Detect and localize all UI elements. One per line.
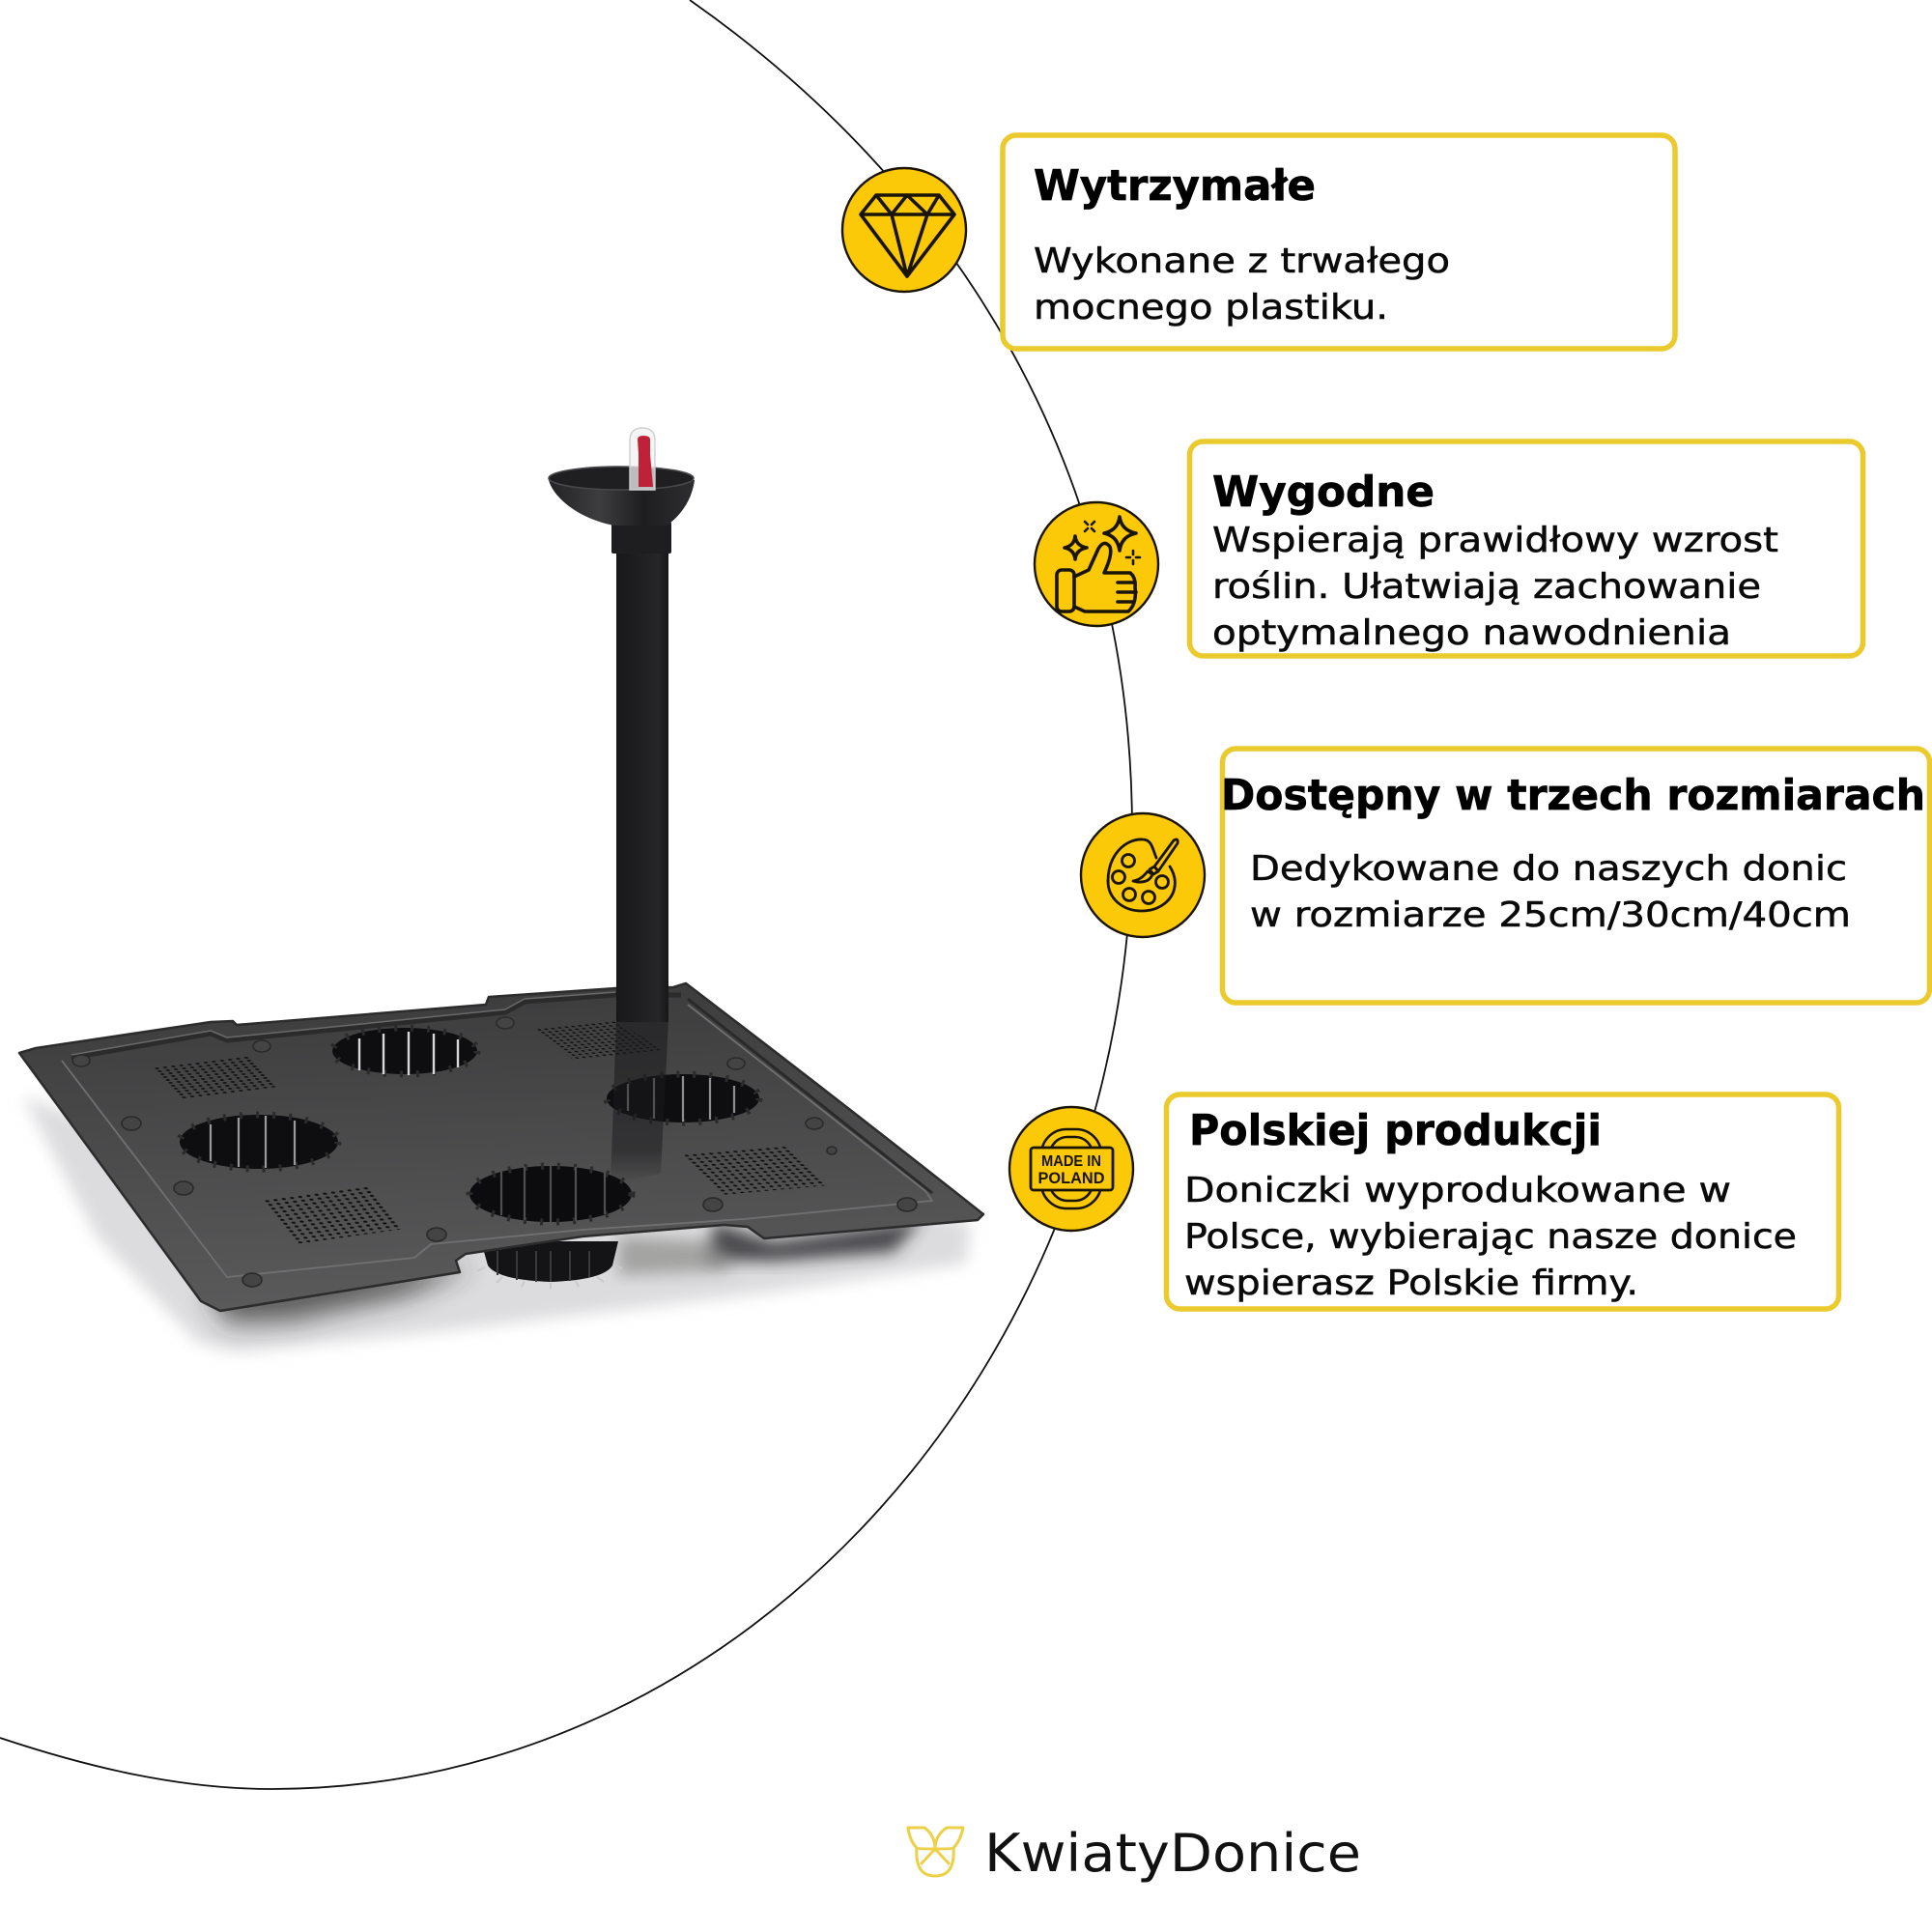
heading: Wygodne [1212, 468, 1435, 517]
body text [1034, 242, 1450, 327]
plate body [19, 983, 983, 1311]
body text: Wykonane z trwałego [1034, 242, 1450, 281]
plate bolts [72, 1017, 917, 1287]
logo mark: butterfly [908, 1828, 963, 1876]
icon: made in Poland badge: MADE IN [1041, 1153, 1101, 1170]
plate raised rim lines [62, 992, 932, 1277]
body text [1250, 849, 1851, 935]
hole top [332, 1028, 477, 1075]
funnel [549, 467, 695, 526]
tube collar [611, 522, 671, 554]
feature card: Wytrzymałe [1003, 135, 1675, 349]
body text: w rozmiarze 25cm/30cm/40cm [1250, 895, 1851, 935]
water level indicator [630, 428, 655, 490]
heading: Polskiej produkcji [1189, 1106, 1602, 1155]
body text: Polsce, wybierając nasze donice [1184, 1217, 1797, 1257]
feature card: Dostępny w trzech rozmiarach [1221, 749, 1930, 1003]
body text: Doniczki wyprodukowane w [1184, 1171, 1731, 1210]
plate shadow [23, 1096, 971, 1352]
icon: made in Poland badge: POLAND [1037, 1169, 1105, 1187]
body text: Wspierają prawidłowy wzrost [1212, 521, 1778, 560]
icon: made in Poland badge [1009, 1107, 1133, 1231]
reservoir tube [616, 541, 668, 1022]
body text: wspierasz Polskie firmy. [1184, 1264, 1638, 1303]
heading: Dostępny w trzech rozmiarach [1221, 771, 1925, 820]
hole right [607, 1074, 759, 1122]
icon: thumbs up with sparkles [1035, 502, 1158, 626]
feature card: Polskiej produkcji [1167, 1094, 1839, 1309]
body text: optymalnego nawodnienia [1212, 613, 1731, 653]
brand logo [908, 1823, 1361, 1884]
product photo: watering insert [19, 428, 983, 1352]
logo wordmark: KwiatyDonice [984, 1823, 1361, 1884]
hole left [180, 1115, 338, 1169]
plate perforated vents [152, 1021, 829, 1244]
hole front [469, 1166, 632, 1222]
icon: diamond [842, 168, 966, 292]
curved connector line [0, 0, 1132, 1789]
body text [1212, 521, 1778, 653]
heading: Wytrzymałe [1034, 161, 1316, 211]
body text [1184, 1171, 1797, 1303]
body text: roślin. Ułatwiają zachowanie [1212, 567, 1761, 607]
pole shadow on plate [611, 1020, 668, 1183]
lower pot of reservoir leg [477, 1241, 622, 1289]
feature card: Wygodne [1190, 441, 1862, 656]
icon: paint palette and brush [1081, 813, 1205, 937]
body text: Dedykowane do naszych donic [1250, 849, 1847, 889]
body text: mocnego plastiku. [1034, 288, 1388, 327]
